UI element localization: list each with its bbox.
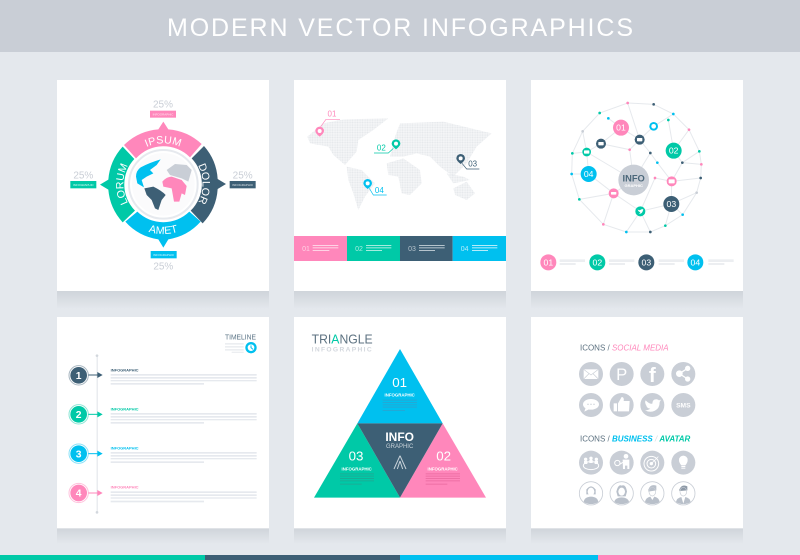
label: left 25% [70,170,96,188]
legend bar: 02 [347,236,400,261]
timeline heading: TIMELINE [225,332,256,341]
step 4: 4 [76,489,82,500]
triangle 01: INFOGRAPHIC [385,393,415,398]
triangle 02: 02 [436,449,451,464]
icon: share [671,362,695,386]
legend 03: 03 [642,257,651,267]
pin 03: 03 [468,160,478,169]
step 2: INFOGRAPHIC [111,406,139,411]
pin 04: 04 [375,186,384,195]
legend bar: 03: 03 [408,246,416,253]
legend bar: 04 [453,236,506,261]
node 02: 02 [669,146,679,156]
legend 01 [540,254,585,270]
legend 04: 04 [691,257,700,267]
icon: sms [671,393,695,417]
legend 01: 01 [544,257,553,267]
icon: sms: SMS [676,402,691,409]
icon: mail [579,362,603,386]
pin 04 [363,179,387,195]
icon: facebook: f [649,364,656,387]
dotted world map [307,118,492,210]
pin 01 [315,110,340,137]
icon: facebook [640,362,664,387]
center triangle: INFO [385,430,414,444]
legend bar: 02: 02 [355,246,363,253]
legend 03 [638,254,684,270]
small nodes [570,102,703,233]
icon: pinterest [610,362,634,386]
step 3: INFOGRAPHIC [111,445,139,450]
step 1 [69,366,257,385]
vertical axis [96,354,98,514]
triangle 02: INFOGRAPHIC [428,466,458,471]
segment: lorum: LORUM [116,163,128,206]
icon: light bulb [671,451,695,475]
triangle 02 [400,423,486,498]
triangle heading: INFOGRAPHIC [312,346,372,353]
pin 03 [456,154,479,169]
icon: thumbs up [610,393,634,417]
title: MODERN VECTOR INFOGRAPHICS [167,14,633,42]
avatar: man 1 [641,482,664,505]
avatar: man 2 [672,482,695,505]
step 1: INFOGRAPHIC [111,367,139,372]
node 01 [613,120,629,136]
legend bar: 03 [400,236,453,261]
label: bottom 25%: 25% [153,261,173,272]
node 03 [663,196,679,212]
icon: twitter [640,393,664,417]
label: top 25% [150,100,176,118]
label: bottom 25%: INFOGRAPHIC [153,253,175,257]
node 03: 03 [667,199,676,209]
central info node: INFO [623,173,645,183]
pin 02: 02 [377,144,386,153]
central info node: GRAPHIC [624,183,643,188]
step 4 [69,483,257,503]
node 01: 01 [616,123,626,133]
panel: world map [294,80,506,291]
step 3: 3 [76,449,82,460]
segment: amet [125,212,201,248]
panel: triangle [294,317,506,528]
triangle heading: TRIANGLE [312,333,373,347]
step 2: 2 [76,410,82,421]
legend bar: 01: 01 [302,246,310,253]
node 02 [666,143,682,159]
step 3 [69,444,257,463]
label: left 25%: 25% [73,170,93,181]
icon: presenter [610,451,634,475]
panel shadows [57,291,743,544]
center triangle [357,423,443,498]
panel: donut chart [57,80,269,291]
icon nodes [582,122,677,216]
header band [0,0,800,52]
step 1: 1 [76,371,82,382]
label: right 25% [230,170,256,188]
central info node [618,165,649,195]
triangle 01: 01 [392,375,407,390]
pin 01: 01 [328,110,337,119]
segment: amet: AMET [148,224,176,234]
segment: dolor: DOLOR [198,163,210,204]
triangle 01 [357,349,443,423]
label: bottom 25% [151,251,177,272]
node 04: 04 [584,169,594,179]
center triangle: GRAPHIC [386,444,414,450]
label: right 25%: 25% [233,170,253,181]
icon: chat [579,393,603,417]
globe [129,150,198,219]
label: top 25%: INFOGRAPHIC [153,112,174,116]
icon: team [579,451,603,475]
heading: social media: ICONS / SOCIAL MEDIA [580,344,669,353]
panel: timeline [57,317,269,528]
avatar: woman 2 [610,482,633,505]
label: top 25%: 25% [153,100,173,111]
step 2 [69,405,257,424]
node 04 [581,166,597,182]
legend bar: 01 [294,236,347,261]
triangle heading [312,333,373,353]
triangle 03 [314,423,400,498]
heading: business and avatar: ICONS / BUSINESS / AVATAR [580,435,691,444]
panel: network sphere [531,80,743,291]
panel: icons [531,317,743,528]
step 4: INFOGRAPHIC [111,485,139,490]
triangle 03: 03 [349,449,363,464]
triangle 03: INFOGRAPHIC [342,466,372,471]
timeline heading [225,332,257,353]
legend 02 [589,254,634,270]
pin 02 [374,139,400,153]
avatar: woman 1 [579,482,603,505]
legend 02: 02 [593,257,602,267]
bottom colour strip [0,555,800,560]
legend bar: 04: 04 [461,246,469,253]
label: right 25%: INFOGRAPHIC [232,183,254,187]
segment: ipsum: IPSUM [144,136,182,147]
legend 04 [687,254,734,270]
icon: target [640,451,664,475]
segment: lorum [100,146,135,222]
segment: ipsum [124,122,202,158]
label: left 25%: INFOGRAPHIC [73,183,95,187]
icon: pinterest: P [616,365,627,384]
segment: dolor [190,146,226,224]
network lines [572,103,701,232]
